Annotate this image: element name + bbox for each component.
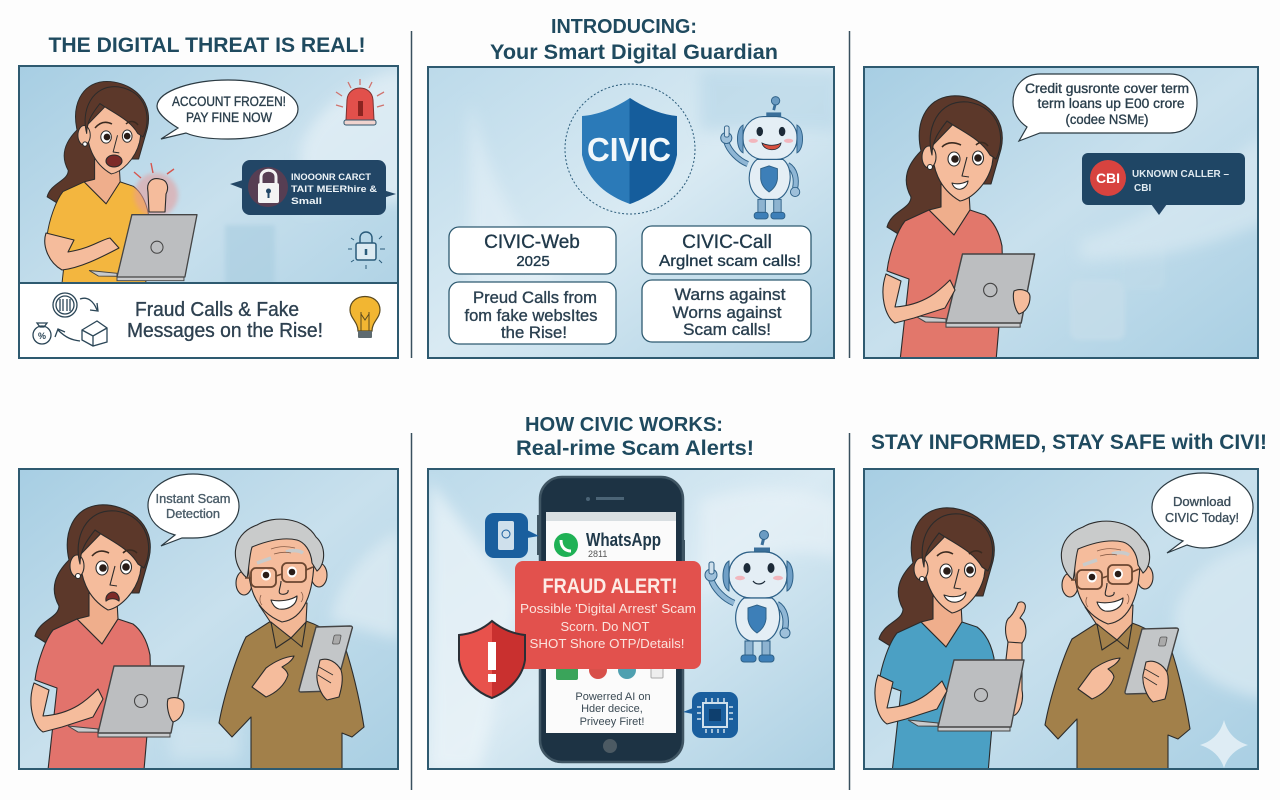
icon: fraud flow: % (38, 331, 46, 341)
icon: red alarm siren (336, 79, 384, 125)
whatsapp row: WhatsApp (586, 530, 661, 550)
civic shield logo (565, 84, 695, 214)
speech bubble: download civic: Download (1173, 494, 1231, 509)
robot mascot (705, 530, 793, 662)
panel 6: stay informed (864, 469, 1270, 779)
icon: blue phone tag (485, 513, 539, 558)
title: the digital threat is real: THE DIGITAL THREAT IS REAL! (48, 34, 366, 57)
icon: CBI badge (1090, 160, 1126, 196)
app icons row (556, 661, 663, 680)
card: fraud calls from websites: Preud Calls from (473, 288, 597, 307)
caller id box: UKNOWN CALLER – (1132, 169, 1229, 180)
title: stay informed: STAY INFORMED, STAY SAFE with CIVI! (871, 431, 1267, 454)
card: warns against: Worns against (672, 303, 782, 322)
card: civic-call (642, 226, 811, 274)
robot mascot (721, 97, 803, 219)
card: civic-call: Arglnet scam calls! (659, 253, 801, 270)
speech bubble: instant scam detection (148, 474, 239, 546)
title: how civic works: HOW CIVIC WORKS: (525, 414, 723, 436)
fraud alert card: FRAUD ALERT! (542, 575, 678, 598)
elderly man with tablet (219, 519, 364, 777)
woman with laptop (883, 96, 1035, 361)
title: how civic works: Real-rime Scam Alerts! (516, 437, 754, 460)
speech bubble: instant scam detection: Detection (166, 507, 220, 521)
card: civic-web: CIVIC-Web (484, 232, 580, 253)
privacy text: Priveey Firet! (580, 716, 644, 728)
fraud alert card (515, 561, 701, 669)
icon: chip tag (683, 692, 738, 738)
woman with thumbs up (875, 508, 1026, 773)
speech bubble: account frozen: ACCOUNT FROZEN! (172, 94, 286, 109)
speech bubble: account frozen: PAY FINE NOW (186, 110, 272, 125)
speech bubble: credit guarantee: term loans up E00 crore (1038, 96, 1184, 111)
privacy text: Powerred AI on (575, 691, 651, 703)
privacy text: Hder decice, (581, 703, 643, 715)
whatsapp row: 2811 (588, 549, 607, 559)
fraud alert card: Scorn. Do NOT (560, 619, 650, 634)
woman worried (31, 505, 184, 770)
caller id box (1082, 153, 1245, 215)
title: introducing: INTRODUCING: (551, 16, 697, 38)
card: fraud calls from websites: the Rise! (501, 323, 567, 342)
caption text: Messages on the Rise! (127, 320, 323, 342)
speech bubble: instant scam detection: Instant Scam (156, 492, 230, 506)
fraud alert card: SHOT Shore OTP/Details! (530, 636, 684, 651)
card: civic-web (449, 227, 616, 274)
card: warns against: Scam calls! (683, 320, 771, 339)
alert box: locked account: Small (291, 196, 322, 207)
icon: lightbulb (350, 296, 380, 338)
icon: red warning shield (459, 621, 525, 698)
caption text: Fraud Calls & Fake (135, 299, 299, 321)
caption text (127, 299, 323, 342)
card: warns against: Warns against (674, 285, 786, 304)
icon: CBI badge: CBI (1096, 170, 1120, 186)
divider (412, 31, 850, 790)
caller id box: CBI (1134, 183, 1151, 194)
card: civic-call: CIVIC-Call (682, 232, 772, 253)
speech bubble: account frozen (157, 80, 298, 139)
panel 3: unknown caller (864, 67, 1270, 361)
icon: small padlock (348, 232, 385, 269)
card: fraud calls from websites: fom fake websItes (464, 306, 598, 325)
alert box: locked account (230, 160, 396, 215)
privacy text (575, 691, 651, 728)
civic shield logo: CIVIC (587, 131, 671, 168)
title: introducing: Your Smart Digital Guardian (490, 41, 778, 64)
panel 5: how civic works (428, 469, 840, 770)
whatsapp row (554, 530, 661, 559)
icon: fraud flow (33, 293, 107, 346)
card: civic-web: 2025 (516, 253, 550, 270)
icon: sparkle star (1200, 720, 1248, 768)
elderly man with tablet (1045, 521, 1190, 779)
panel 4: instant scam detection (19, 469, 400, 777)
card: warns against (642, 280, 811, 342)
fraud alert card: Possible 'Digital Arrest' Scam (520, 602, 696, 616)
speech bubble: credit guarantee: (codee NSMᴇ) (1066, 112, 1148, 127)
speech bubble: credit guarantee (1013, 74, 1197, 141)
speech bubble: download civic: CIVIC Today! (1165, 510, 1239, 525)
title: how civic works (516, 414, 754, 460)
caption strip: fraud calls (19, 283, 398, 358)
alert box: locked account: INOOONR CARCT (291, 172, 371, 183)
woman with shocked expression (44, 81, 198, 282)
card: fraud calls from websites (449, 282, 616, 344)
panel 2: civic introduction (428, 67, 840, 358)
title: introducing (490, 16, 778, 64)
speech bubble: credit guarantee: Credit gusronte cover term (1025, 81, 1189, 96)
panel 1: digital threat (19, 66, 410, 358)
alert box: locked account: TAIT MEERhire & (291, 184, 377, 195)
speech bubble: download civic (1152, 473, 1253, 553)
smartphone (537, 477, 685, 762)
